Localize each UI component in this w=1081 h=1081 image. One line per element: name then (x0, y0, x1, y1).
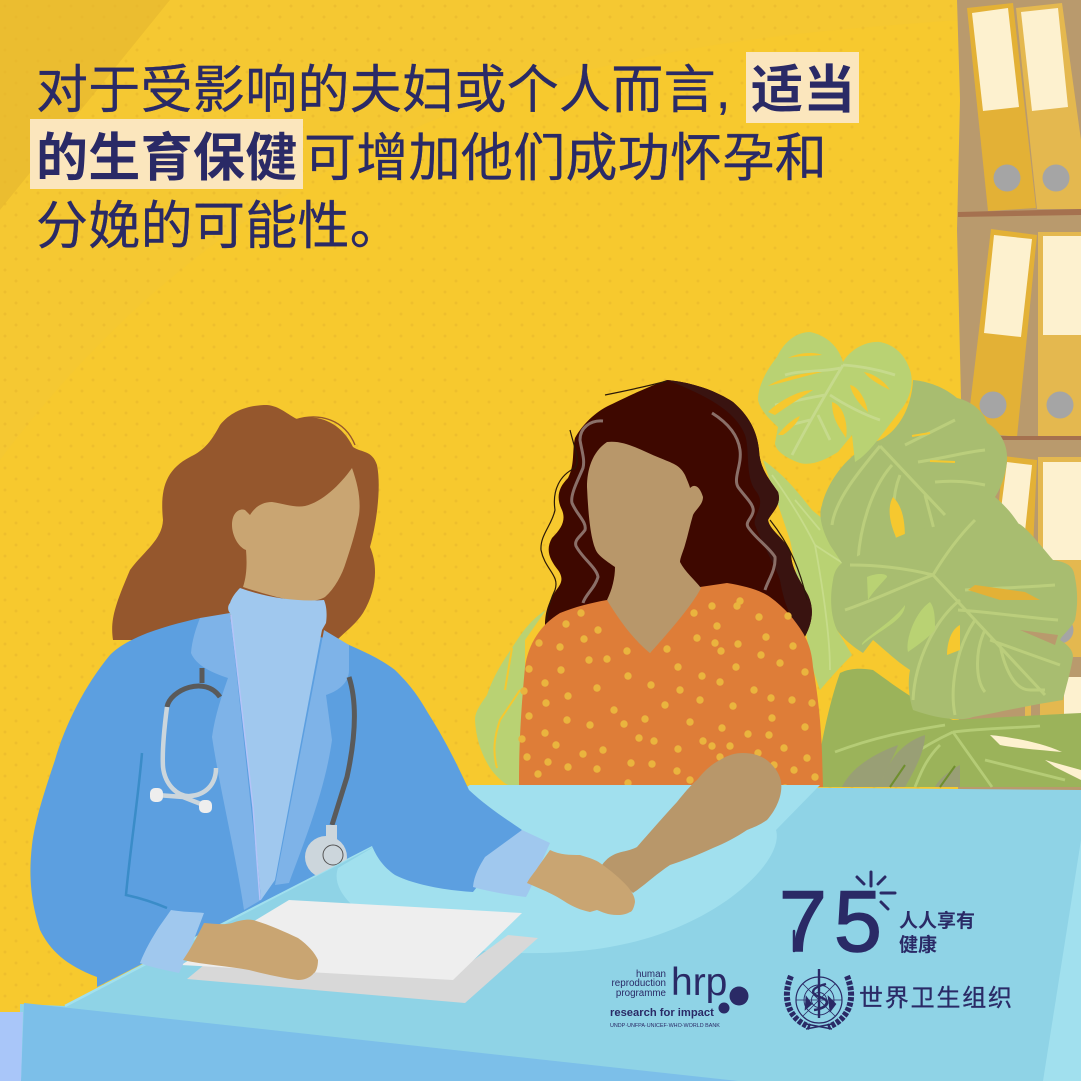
binder 4 (1038, 232, 1081, 437)
title text: 适当 (751, 62, 856, 120)
hair outline strokes (541, 381, 807, 630)
binder 5 (985, 456, 1037, 660)
lower binders (1024, 657, 1081, 787)
desk surface (20, 785, 1081, 1081)
leaf middle large (820, 380, 1025, 620)
WHO name: 世界卫生组织 (859, 985, 1014, 1012)
patient arm (602, 753, 781, 893)
desk front panel (21, 1003, 738, 1081)
back sheet (187, 935, 538, 1003)
title text: 可增加他们成功怀孕和 (304, 130, 827, 188)
logo: 75 years (779, 872, 975, 970)
logo: hrp: human (636, 969, 666, 980)
desk (0, 785, 1081, 1081)
right cuff (473, 830, 550, 897)
shelf back panel (957, 0, 1081, 790)
logo: WHO (787, 969, 1014, 1029)
binder 1 (967, 3, 1036, 211)
title highlights (30, 52, 859, 189)
patient top (519, 583, 823, 827)
leaf behind patient left (475, 610, 546, 785)
doctor hair (112, 405, 379, 640)
binder 6 (1038, 457, 1081, 657)
lapel edge (231, 615, 260, 900)
logo: 75 years: 5 (834, 874, 882, 970)
desk right highlight (1043, 840, 1081, 1081)
lab coat (30, 618, 522, 987)
leaf large front (831, 520, 1077, 719)
patient hair (545, 380, 812, 640)
sun rays (857, 872, 895, 909)
papers (181, 900, 538, 1003)
logo: hrp: hrp (671, 961, 727, 1004)
logo: hrp: reproduction (612, 978, 666, 989)
binder 2 (1016, 3, 1081, 209)
logo: hrp: research for impact (610, 1007, 714, 1019)
coat pocket line (126, 753, 167, 908)
small stroke beside the 7 (793, 931, 795, 951)
doctor (30, 405, 635, 987)
turtleneck (228, 588, 327, 900)
title text: 对于受影响的夫妇或个人而言, (36, 62, 731, 120)
desk light area (337, 785, 820, 953)
title text (36, 62, 856, 256)
stethoscope (150, 668, 355, 878)
title text: 分娩的可能性。 (36, 198, 402, 256)
logo: 75 years: 7 (779, 874, 827, 970)
doctor face (232, 468, 360, 601)
inner lapels (191, 613, 349, 910)
doctor right hand (527, 850, 635, 915)
shelf plank 1 (958, 209, 1081, 217)
front sheet (181, 900, 522, 980)
hair highlights (572, 413, 775, 603)
logo: hrp: programme (616, 988, 667, 999)
logo: 75 years: 人人享有 (899, 910, 975, 932)
patient face and neck (587, 442, 703, 653)
hair shading band (667, 380, 812, 640)
top polka dots (518, 597, 819, 824)
title text: 的生育保健 (36, 130, 298, 188)
binder 3 (967, 229, 1037, 437)
leaf behind patient right (763, 460, 860, 690)
doctor hair strand (295, 417, 355, 445)
lower left corner (0, 1012, 23, 1081)
logo: hrp (610, 961, 748, 1029)
shelf plank 2 (1000, 436, 1081, 440)
plant (475, 332, 1081, 787)
logo: hrp: UNDP·UNFPA·UNICEF·WHO·WORLD BANK (610, 1023, 720, 1029)
logo: 75 years: 健康 (899, 933, 937, 956)
bookshelf with binders (957, 0, 1081, 790)
desk left edge highlight (65, 846, 372, 1006)
doctor left hand and cuff (140, 910, 318, 980)
patient (518, 380, 823, 827)
WHO emblem (787, 969, 851, 1029)
leaf bottom (820, 669, 1081, 787)
leaf top light (758, 332, 912, 464)
